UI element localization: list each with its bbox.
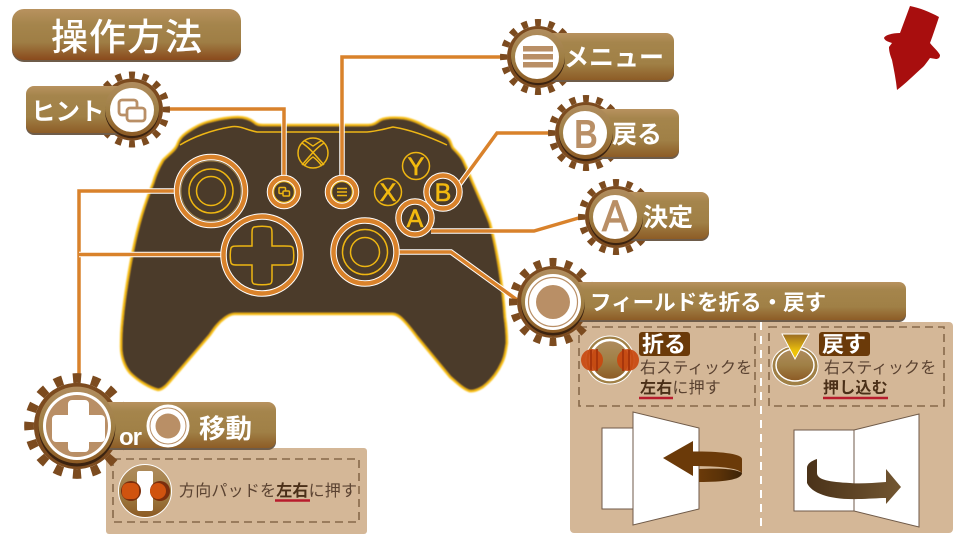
button Y: Y — [408, 153, 425, 181]
diagram: folding the field — [602, 412, 742, 525]
icon: right stick pushed left and right — [581, 336, 639, 384]
connector lines — [79, 57, 582, 380]
text: d-pad instruction: 方向パッドを左右に押す — [179, 482, 357, 500]
icon: menu — [523, 46, 553, 68]
dashed divider — [760, 322, 762, 530]
callout: hint: ヒント — [31, 99, 104, 126]
callout: menu: メニュー — [564, 44, 664, 72]
title: 操作方法 — [51, 17, 203, 58]
icon: stick — [146, 404, 190, 448]
right stick — [342, 230, 388, 274]
left stick — [181, 161, 241, 221]
text: fold instruction: 左右に押す — [640, 379, 721, 397]
button A: A — [407, 205, 424, 233]
icon: xbox logo — [298, 138, 328, 168]
text: restore instruction: 右スティックを — [824, 359, 936, 377]
icon: red top hat silhouette — [884, 6, 940, 90]
text: fold instruction — [639, 359, 752, 398]
button Y — [402, 152, 430, 181]
button B: B — [435, 179, 451, 207]
callout: confirm — [582, 182, 709, 252]
callout: menu — [504, 22, 674, 92]
callout: move — [29, 378, 276, 474]
controller — [121, 117, 507, 391]
callout: back: B — [574, 110, 598, 157]
button X: X — [380, 179, 397, 207]
text: restore instruction — [823, 359, 936, 398]
text: fold instruction: 右スティックを — [640, 359, 752, 377]
callout: fold or restore field: フィールドを折る・戻す — [590, 291, 826, 315]
icon: hint — [119, 100, 145, 121]
icon: d-pad — [52, 400, 105, 452]
controller body — [121, 117, 507, 391]
panel: fold and restore instructions — [570, 322, 953, 533]
callout: move: 移動 — [199, 414, 252, 444]
highlight rings — [177, 157, 460, 294]
title — [12, 9, 241, 62]
icon: d-pad pushed left and right — [118, 464, 172, 518]
d-pad — [230, 226, 294, 285]
callout: move: or — [119, 424, 142, 451]
panel: d-pad instruction — [106, 448, 367, 534]
diagram: restoring the field — [794, 414, 919, 527]
icon: right stick pressed in — [772, 334, 818, 386]
button X — [374, 178, 402, 207]
callout: hint — [26, 75, 166, 144]
label: fold: 折る — [642, 332, 686, 357]
hint button — [274, 182, 294, 202]
callout: confirm: 決定 — [643, 204, 693, 232]
controller top trim line — [180, 127, 447, 145]
text: restore instruction: 押し込む — [823, 379, 888, 397]
menu button — [332, 182, 352, 202]
label: restore: 戻す — [822, 332, 866, 357]
callout: confirm: A — [602, 191, 628, 241]
callout: back — [552, 98, 679, 168]
callout: fold or restore field — [513, 262, 906, 342]
callout: back: 戻る — [612, 121, 662, 149]
